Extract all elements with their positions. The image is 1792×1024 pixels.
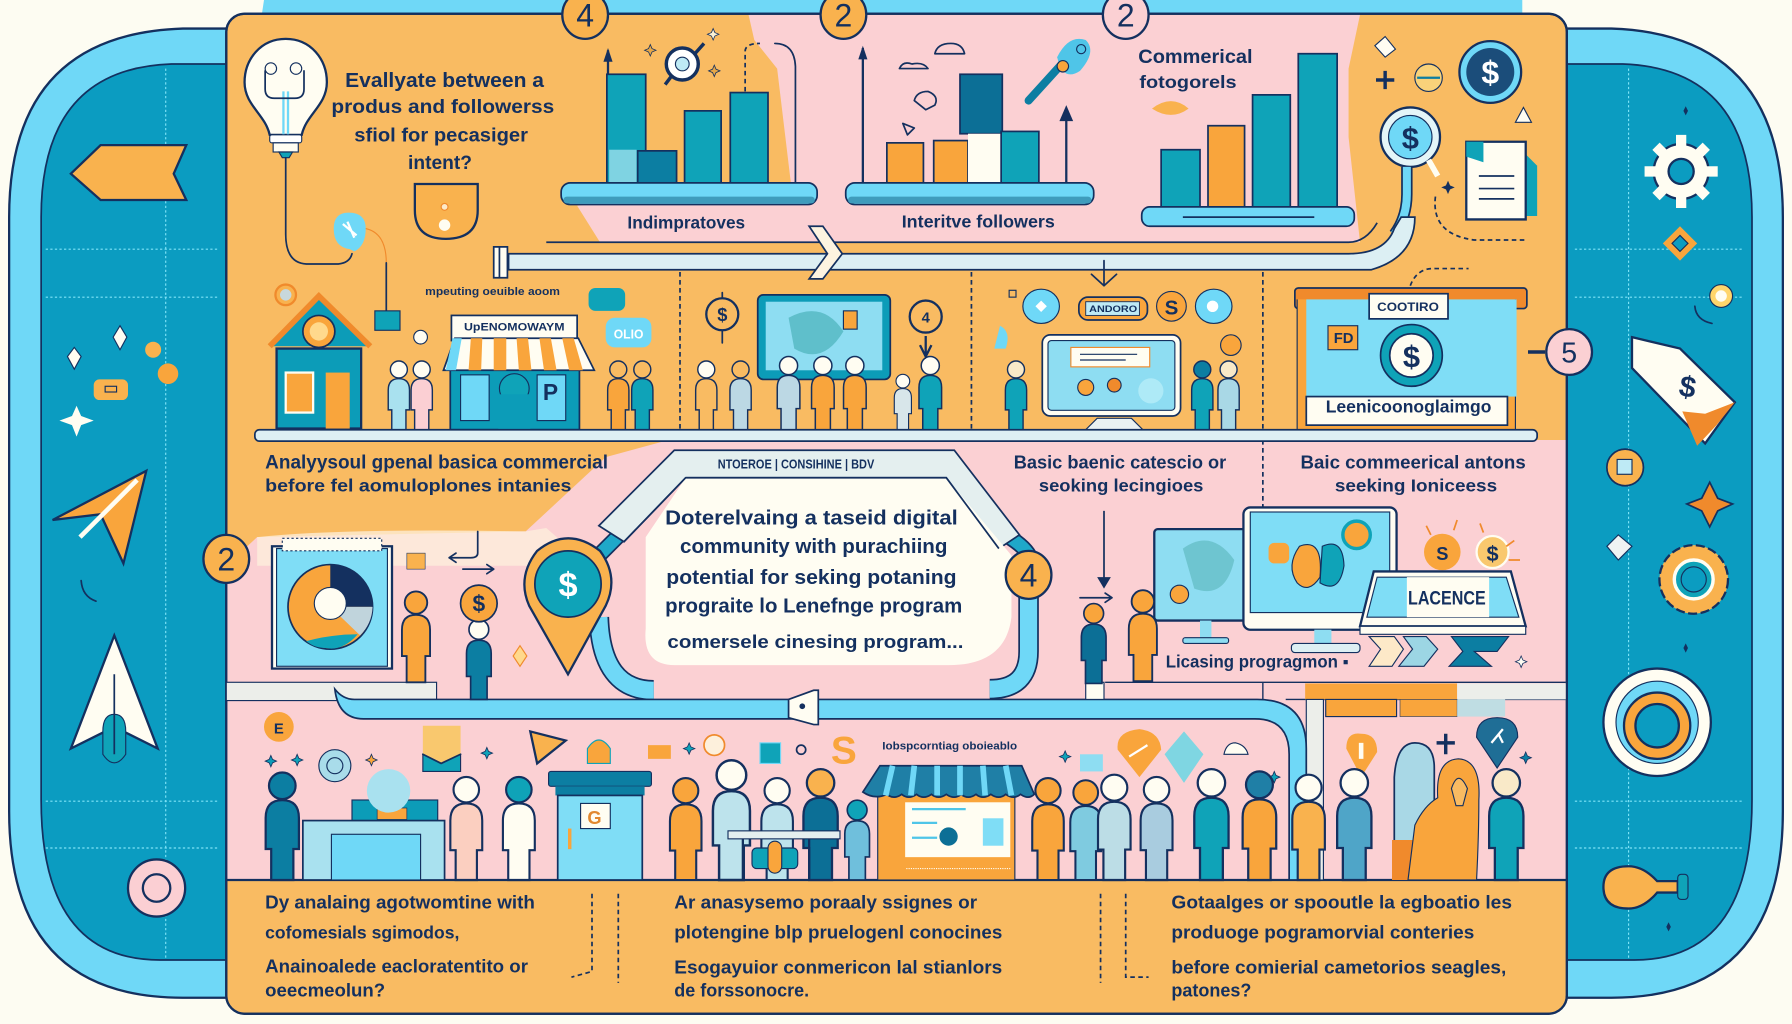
- icon: storefront: P: [543, 379, 558, 405]
- people: hooded figures: [1392, 759, 1523, 880]
- panel: left blue side: [9, 29, 229, 998]
- label: chart 2: Interitve followers: [902, 211, 1055, 231]
- text: bottom column 1: Dy analaing agotwomtine with: [265, 892, 535, 913]
- people: bottom left: [266, 772, 535, 880]
- chart: bars 3: [1138, 46, 1354, 226]
- panel: main board: [226, 14, 1567, 1014]
- text: licensing label: Licasing progragmon ▪: [1166, 651, 1349, 671]
- panel: right blue side: [1563, 29, 1783, 998]
- label: chart 3: [1138, 46, 1253, 92]
- icon: licence stand: LACENCE: [1408, 588, 1486, 610]
- icon: light bulb: [245, 39, 352, 264]
- text: bottom column 3: produoge pogramorvial conteries: [1171, 921, 1474, 942]
- panel: central callout: [599, 450, 1019, 665]
- icon: monitor with app: [1042, 335, 1181, 430]
- badge: 4 top: [562, 0, 608, 39]
- icon: orange star: [1687, 482, 1733, 527]
- text: bottom column 1: cofomesials sgimodos,: [265, 922, 459, 942]
- icon: chat bubble: [334, 213, 386, 311]
- text: callout banner: NTOEROE | CONSIHINE | BDV: [718, 458, 875, 472]
- text: row 3 captions: Analyysoul gpenal basica commercial: [265, 452, 608, 474]
- text: top question: produs and followerss: [331, 96, 554, 118]
- arrow: upper pipe: [494, 167, 1415, 286]
- icon: licence banner: COOTIRO: [1377, 300, 1439, 314]
- badge: 2 top: [821, 0, 866, 39]
- icon: small pin cluster: [1375, 37, 1531, 122]
- icon: desk with computer: [303, 769, 445, 880]
- text: bottom column 1: Anainoalede eacloratentito or: [265, 956, 528, 977]
- text: top question: [331, 69, 554, 174]
- chart: bars 1: [561, 29, 817, 233]
- people: around app monitor: [1005, 361, 1239, 430]
- icons: floating row bottom left: S: [831, 729, 857, 772]
- icon: shield: [415, 184, 478, 239]
- icon: licence banner: FD: [1334, 331, 1354, 347]
- badge: 2 left: 2: [217, 541, 235, 577]
- icon: licence banner: [1295, 288, 1527, 430]
- text: row 3 captions: Baic commeerical antons: [1301, 452, 1526, 473]
- badge: 5: [1528, 329, 1592, 375]
- icons: badge row above monitor: [994, 289, 1241, 355]
- icon: sparkles and dots: [59, 326, 178, 437]
- icon: orange diamond: [1663, 226, 1697, 261]
- chart: bars 2: [846, 39, 1094, 231]
- text: top question: Evallyate between a: [345, 69, 545, 92]
- icon: clouds and small marks: [899, 43, 965, 135]
- people: monitor audience: [777, 357, 942, 430]
- text: callout body: prograite lo Lenefnge program: [665, 595, 962, 618]
- icon: bottom storefront: [863, 766, 1034, 880]
- badge: 5: 5: [1561, 337, 1577, 369]
- icon: small white badge: [1607, 535, 1632, 560]
- text: row 3 captions: seeking Ioniceess: [1335, 475, 1497, 495]
- text: top question: sfiol for pecasiger: [354, 125, 528, 147]
- icon: dollar coin over person: [461, 585, 497, 622]
- icon: large dollar coin: [1459, 41, 1521, 103]
- text: callout body: comersele cinesing program...: [667, 631, 963, 652]
- arrow: down arrow: [1091, 261, 1117, 286]
- icon: glowing coins: [1424, 520, 1520, 570]
- label: licence banner: Leenicoonoglaimgo: [1326, 397, 1491, 417]
- icon: left arrow: [71, 145, 186, 200]
- text: bottom column 2: Esogayuior conmericon lal stianlors: [674, 957, 1002, 978]
- text: row 3 captions: Basic baenic catescio or: [1014, 452, 1226, 473]
- icon: blue arch: [1394, 743, 1434, 880]
- shelf: row 2: [255, 430, 1537, 441]
- icon: large dollar coin: $: [1481, 54, 1499, 90]
- text: bottom column 2: de forssonocre.: [674, 980, 809, 1001]
- icon: dollar coin row 2: [706, 293, 738, 343]
- icon: main monitor: [1243, 507, 1397, 653]
- dashed dividers bottom: [571, 894, 1149, 983]
- dashed dividers row 2: [680, 272, 1263, 526]
- icon: chat bubbles near shop: [375, 288, 651, 347]
- arrow: lower main pipe: [335, 689, 1306, 880]
- icon: pink ring: [128, 859, 185, 917]
- icon: coin: [1607, 449, 1643, 486]
- text: bottom column 2: plotengine blp pruelogenl conocines: [674, 921, 1002, 942]
- icon: price tag: $: [1676, 370, 1699, 405]
- icon: large ring: [1603, 669, 1711, 776]
- small caption: row 2: mpeuting oeuible aoom: [425, 286, 560, 298]
- icon: small orange cloud: [1152, 101, 1189, 115]
- badge: small 4: [910, 301, 942, 357]
- text: row 3 captions: seoking lecingioes: [1039, 475, 1203, 495]
- icon: location pin: [524, 538, 611, 674]
- icon: location pin: $: [558, 567, 578, 605]
- badge: 4 center right: 4: [1020, 557, 1037, 593]
- icon: storefront: [443, 315, 594, 430]
- icons: floating row bottom left: E: [274, 722, 284, 738]
- shelf: right ledge: [1105, 682, 1566, 880]
- people: bottom middle: [670, 760, 869, 880]
- text: callout body: [665, 507, 963, 652]
- label: chart 1: Indimpratoves: [627, 213, 745, 233]
- icon: magnifier dollar: [1381, 107, 1440, 176]
- text: top question: intent?: [408, 152, 472, 174]
- icon: world monitor: [1154, 529, 1272, 643]
- icon: licence banner: $: [1403, 339, 1420, 374]
- text: bottom column 3: Gotaalges or spooutle la egboatio les: [1171, 892, 1512, 913]
- badge: small 4: 4: [922, 310, 931, 326]
- icon: orange bulb shape: [1603, 866, 1688, 909]
- text: callout body: Doterelvaing a taseid digital: [665, 507, 958, 530]
- icons: badge row above monitor: ANDORO: [1089, 304, 1137, 314]
- icons: floating row bottom right: [1059, 718, 1531, 783]
- icon: door kiosk: G: [587, 807, 602, 828]
- badge: 2 top right: [1103, 0, 1149, 39]
- icon: price tag: [1632, 337, 1735, 446]
- icon: table: [728, 831, 840, 880]
- icon: door kiosk: [549, 771, 651, 880]
- text: row 3 captions: before fel aomuloplones intanies: [265, 475, 571, 495]
- icon: small arrows: [407, 531, 527, 666]
- people: row 2 left: [388, 361, 751, 430]
- icon: presentation monitor: [758, 295, 890, 379]
- icons: floating row bottom left: [264, 712, 857, 799]
- top strip: [261, 0, 1522, 23]
- icon: key: [1029, 39, 1090, 101]
- icon: plus: [1376, 71, 1394, 89]
- shelf: left ledge: [226, 682, 437, 701]
- text: bottom column 3: [1171, 892, 1512, 1001]
- icon: orange gear: [1659, 545, 1728, 614]
- icon: dollar coin over person: $: [472, 590, 485, 616]
- text: bottom column 3: before comierial cametorios seagles,: [1171, 957, 1506, 978]
- text: bottom column 1: [265, 892, 535, 1001]
- text: bottom column 1: oeecmeolun?: [265, 980, 385, 1001]
- badge: 2 left: [203, 535, 249, 583]
- label: chart 3: fotogorels: [1139, 72, 1237, 92]
- icon: orange paper plane: [53, 471, 146, 563]
- icon: document: [1466, 142, 1537, 219]
- text: store caption: Iobspcorntiag oboieablo: [882, 741, 1017, 753]
- arrow: vertical arrow to monitors: [1080, 511, 1112, 602]
- icons: badge row above monitor: S: [1165, 296, 1178, 319]
- badge: 4 center right: [1006, 551, 1051, 599]
- icon: licence stand: [1360, 571, 1526, 666]
- icon: pie chart frame: [272, 538, 392, 669]
- icon: dollar coin row 2: $: [717, 304, 727, 325]
- icon: house: [270, 285, 370, 429]
- text: bottom column 2: [674, 892, 1002, 1001]
- label: chart 3: Commerical: [1138, 46, 1253, 68]
- icon: glowing coins: S: [1436, 543, 1448, 564]
- icon: chat bubbles near shop: OLIO: [614, 327, 644, 341]
- text: row 3 captions: [265, 452, 1526, 495]
- people: by monitors: [1081, 590, 1157, 699]
- people: by pie chart: [402, 591, 491, 699]
- icon: cream paper plane: [71, 635, 158, 763]
- text: callout body: community with purachiing: [680, 535, 947, 558]
- icon: glowing coins: $: [1487, 541, 1499, 566]
- icon: white gear: [1645, 135, 1718, 208]
- text: callout body: potential for seking potaning: [666, 566, 957, 589]
- people: bottom right: [1032, 769, 1371, 880]
- icon: target lens: [665, 43, 704, 85]
- icon: magnifier dollar: $: [1402, 121, 1419, 156]
- text: bottom column 2: Ar anasysemo poraaly ssignes or: [674, 892, 977, 913]
- icon: glowing ball: [1695, 285, 1733, 323]
- icon: storefront: UpENOMOWAYM: [464, 321, 565, 333]
- arrow: pipes around callout: [592, 528, 1031, 690]
- text: bottom column 3: patones?: [1171, 980, 1251, 1001]
